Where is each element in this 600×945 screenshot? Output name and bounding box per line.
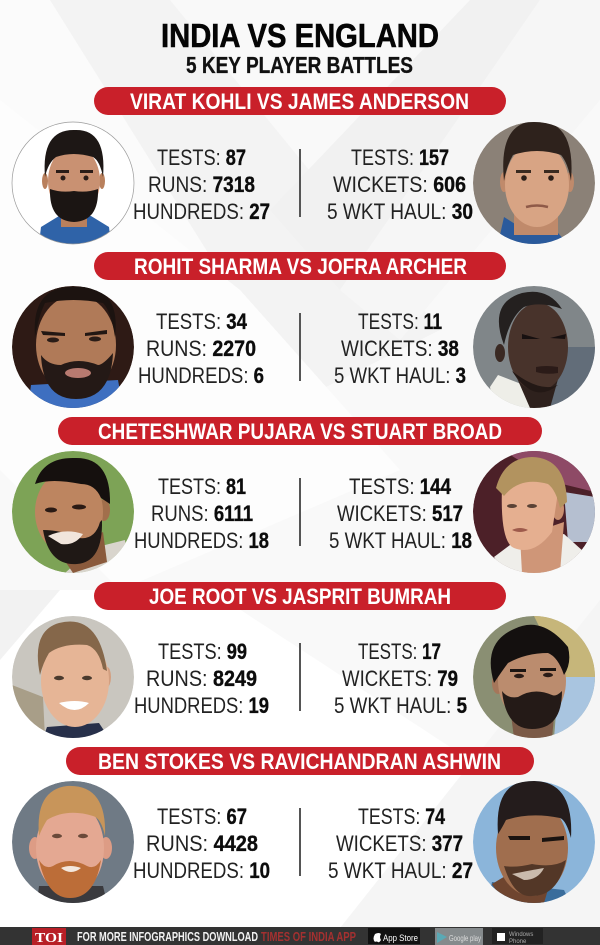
- stats: Root: [134, 639, 269, 718]
- badge: App Store: App Store: [383, 933, 418, 943]
- stats: Root: TESTS: 99: [158, 639, 247, 664]
- panel: Kohli vs Anderson: [12, 87, 595, 244]
- badge: Google Play: Google play: [449, 934, 481, 943]
- stats: Root: HUNDREDS: 19: [134, 693, 269, 718]
- footer bar: [0, 927, 600, 945]
- stats: Broad: WICKETS: 517: [337, 501, 463, 526]
- stats: Pujara: HUNDREDS: 18: [134, 528, 269, 553]
- stats: Ashwin: 5 WKT HAUL: 27: [328, 858, 473, 883]
- panel: Sharma vs Archer: [12, 252, 595, 408]
- title: INDIA VS ENGLAND: [161, 17, 439, 54]
- panel: Pujara vs Broad: [12, 417, 595, 573]
- stats: Anderson: WICKETS: 606: [333, 172, 466, 197]
- panel: Stokes vs Ashwin: [12, 747, 595, 903]
- footer text: FOR MORE INFOGRAPHICS DOWNLOAD: [77, 929, 258, 944]
- stats: Pujara: RUNS: 6111: [151, 501, 253, 526]
- portrait: Jasprit Bumrah: [473, 616, 595, 738]
- stats: Kohli: TESTS: 87: [157, 145, 246, 170]
- portrait: Cheteshwar Pujara: [12, 451, 134, 573]
- stats: Ashwin: TESTS: 74: [358, 804, 446, 829]
- stats: Anderson: TESTS: 157: [351, 145, 449, 170]
- heading pill: Root vs Bumrah: JOE ROOT VS JASPRIT BUMRAH: [149, 584, 451, 609]
- stats: Stokes: RUNS: 4428: [146, 831, 258, 856]
- stats: Sharma: TESTS: 34: [156, 309, 248, 334]
- stats: Pujara: [134, 474, 269, 553]
- panel: Root vs Bumrah: [12, 582, 595, 738]
- heading pill: Pujara vs Broad: CHETESHWAR PUJARA VS STUART BROAD: [98, 419, 502, 444]
- portrait: James Anderson: [473, 121, 595, 244]
- badge: Windows Phone: [492, 928, 543, 945]
- stats: Bumrah: TESTS: 17: [358, 639, 441, 664]
- stats: Archer: WICKETS: 38: [341, 336, 459, 361]
- badge: Windows Phone: Windows: [509, 932, 533, 938]
- stats: Sharma: [138, 309, 264, 388]
- TOI logo: [32, 928, 66, 945]
- portrait: Rohit Sharma: [12, 286, 134, 408]
- stats: Broad: [329, 474, 472, 553]
- stats: Ashwin: WICKETS: 377: [336, 831, 463, 856]
- stats: Kohli: [133, 145, 270, 224]
- portrait: Ravichandran Ashwin: [473, 781, 595, 903]
- stats: Bumrah: WICKETS: 79: [342, 666, 458, 691]
- stats: Bumrah: [334, 639, 467, 718]
- portrait: Joe Root: [12, 616, 134, 738]
- heading pill: Sharma vs Archer: ROHIT SHARMA VS JOFRA ARCHER: [134, 254, 467, 279]
- footer app name: TIMES OF INDIA APP: [261, 929, 356, 944]
- stats: Archer: TESTS: 11: [358, 309, 442, 334]
- stats: Anderson: 5 WKT HAUL: 30: [327, 199, 473, 224]
- badge: Windows Phone: Phone: [509, 939, 527, 945]
- badge: Google Play: [435, 928, 483, 945]
- stats: Ashwin: [328, 804, 473, 883]
- stats: Stokes: TESTS: 67: [157, 804, 247, 829]
- stats: Pujara: TESTS: 81: [158, 474, 246, 499]
- stats: Sharma: RUNS: 2270: [146, 336, 256, 361]
- badge: App Store: [368, 928, 420, 944]
- stats: Anderson: [327, 145, 473, 224]
- portrait: Jofra Archer: [473, 286, 595, 408]
- stats: Broad: 5 WKT HAUL: 18: [329, 528, 472, 553]
- portrait: Ben Stokes: [12, 781, 134, 903]
- stats: Archer: 5 WKT HAUL: 3: [334, 363, 466, 388]
- stats: Kohli: HUNDREDS: 27: [133, 199, 270, 224]
- portrait: Virat Kohli: [40, 130, 110, 244]
- stats: Broad: TESTS: 144: [349, 474, 452, 499]
- stats: Bumrah: 5 WKT HAUL: 5: [334, 693, 467, 718]
- heading pill: Stokes vs Ashwin: BEN STOKES VS RAVICHANDRAN ASHWIN: [98, 749, 501, 774]
- subtitle: 5 KEY PLAYER BATTLES: [186, 52, 413, 78]
- stats: Kohli: RUNS: 7318: [148, 172, 255, 197]
- stats: Archer: [334, 309, 466, 388]
- stats: Stokes: HUNDREDS: 10: [133, 858, 270, 883]
- portrait: Stuart Broad: [473, 451, 595, 573]
- heading pill: Kohli vs Anderson: VIRAT KOHLI VS JAMES ANDERSON: [130, 89, 469, 114]
- stats: Stokes: [133, 804, 270, 883]
- stats: Sharma: HUNDREDS: 6: [138, 363, 264, 388]
- stats: Root: RUNS: 8249: [146, 666, 257, 691]
